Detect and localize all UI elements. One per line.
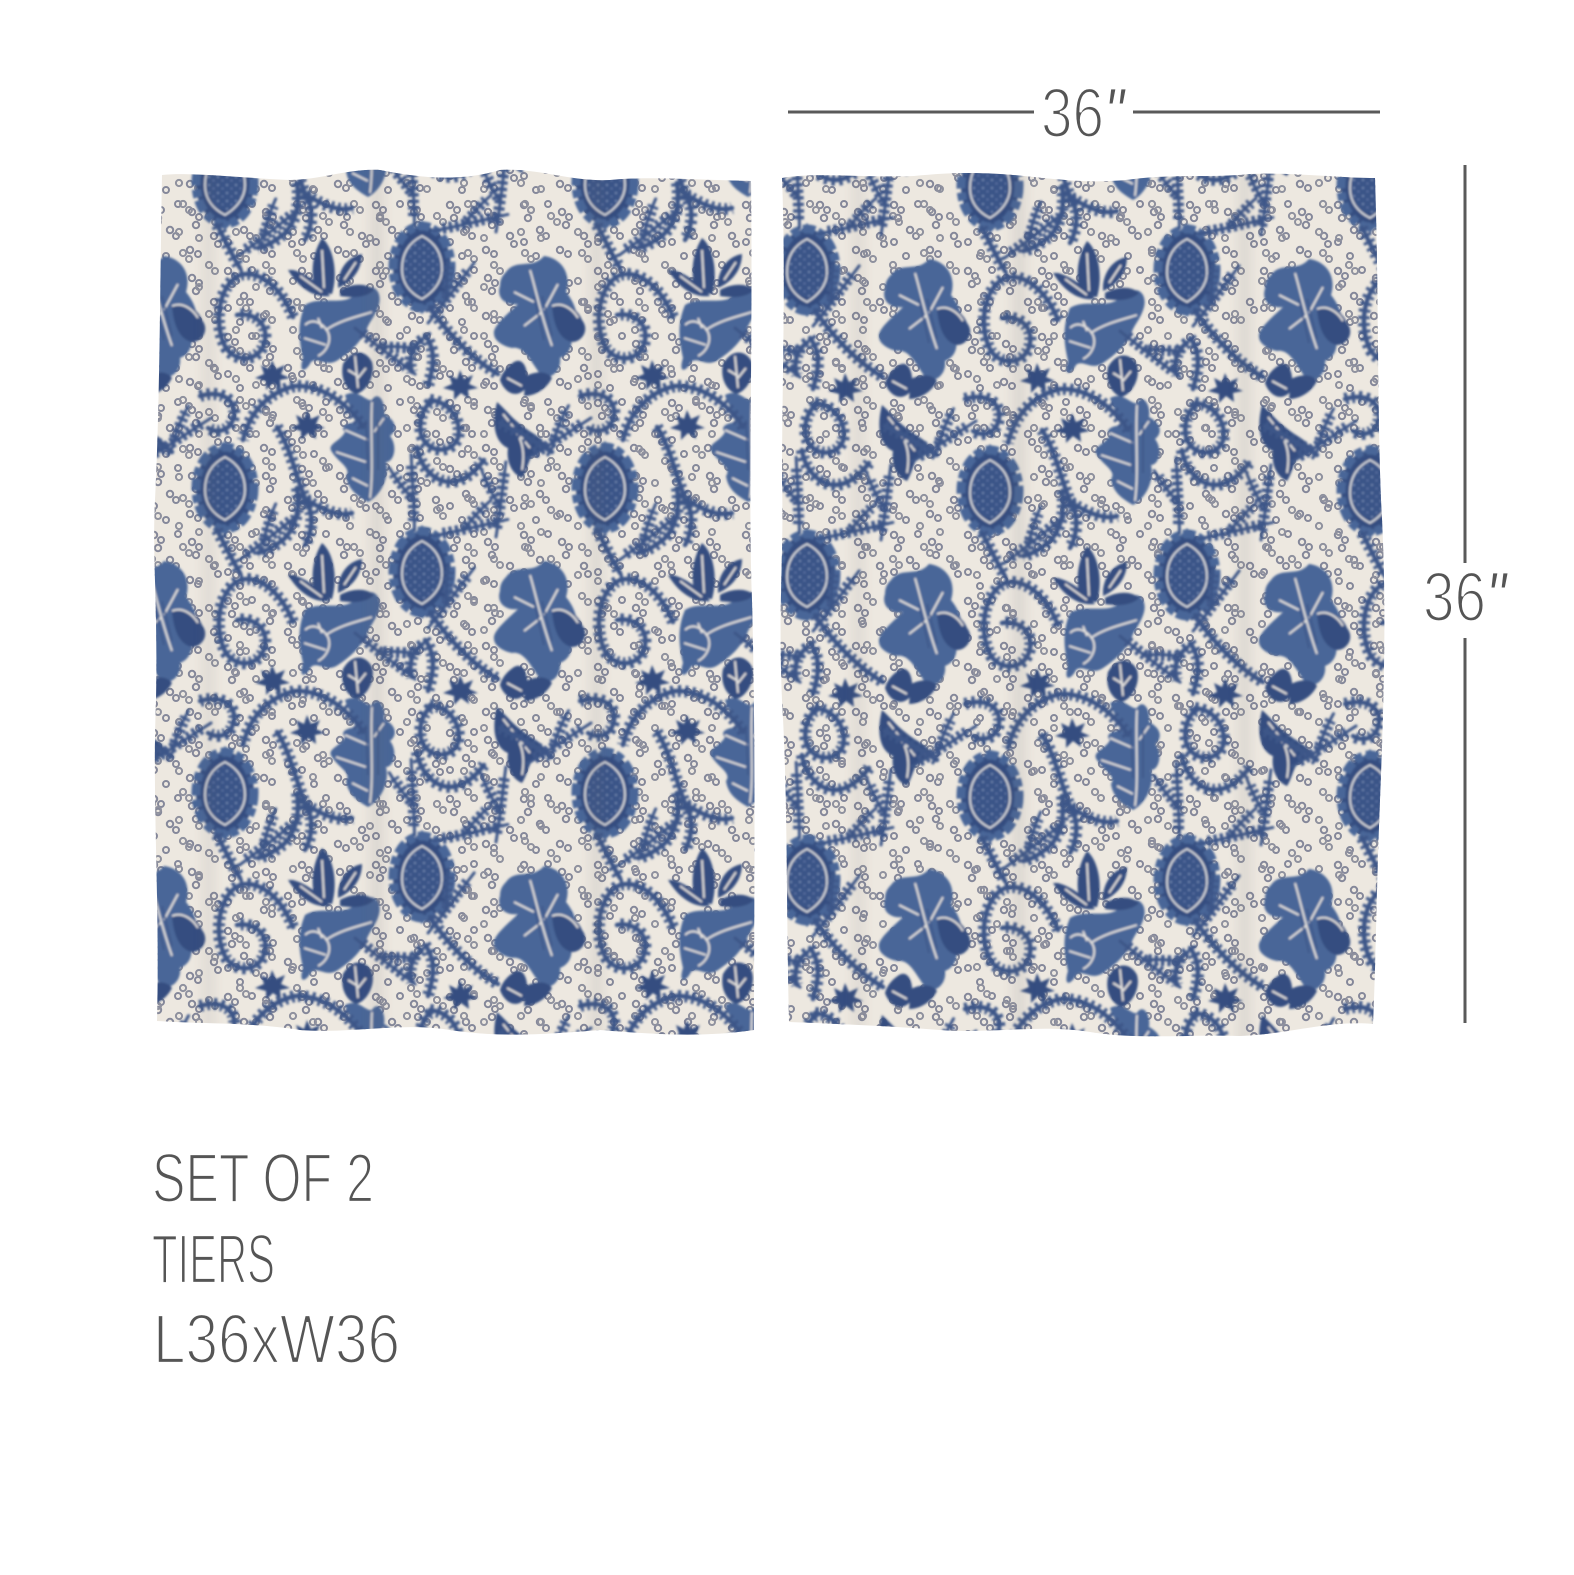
height dimension: 36 inches	[1423, 165, 1509, 1023]
product details text: TIERS	[152, 1220, 275, 1298]
product details text: SET OF 2	[152, 1139, 374, 1217]
infographic canvas	[154, 89, 1508, 1362]
panel: left curtain	[154, 170, 754, 1035]
product details text: L36xW36	[153, 1300, 400, 1378]
height dimension: 36 inches: 36"	[1423, 558, 1509, 636]
panel: right curtain	[780, 173, 1384, 1036]
width dimension: 36 inches	[788, 74, 1380, 152]
product details text	[152, 1139, 400, 1378]
width dimension: 36 inches: 36"	[1041, 74, 1127, 152]
